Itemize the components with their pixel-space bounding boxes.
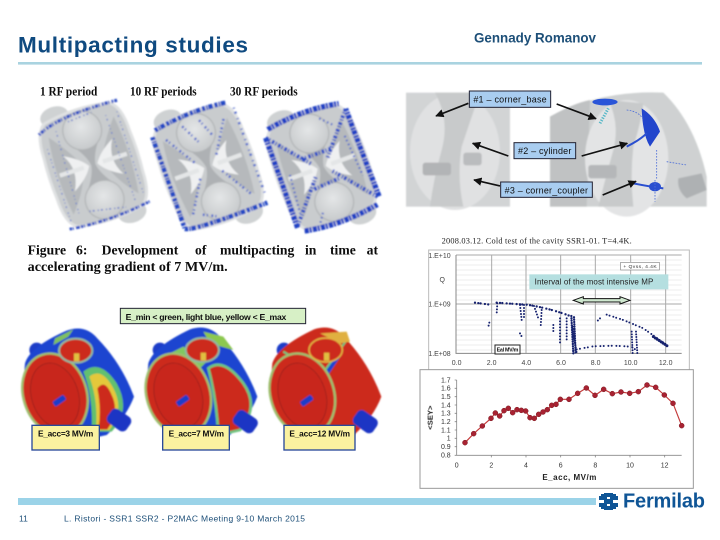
panel: development of multipacting in time: [28, 84, 388, 274]
x axis labels: 4.0: [521, 360, 531, 367]
axis unit box: [495, 345, 520, 354]
x axis labels: 4: [524, 462, 528, 469]
label: 7 MV/m: [163, 425, 229, 450]
label: 12 MV/m: [284, 425, 355, 450]
label: corner coupler: [501, 182, 592, 197]
y axis labels: [428, 253, 451, 358]
cavity: 30 RF periods: [255, 88, 388, 247]
image: cavity left view: [406, 93, 510, 210]
x axis labels: [452, 360, 673, 367]
y axis labels: 1.E+08: [428, 351, 451, 358]
y axis labels: 1.4: [441, 402, 451, 409]
chart legend: + Qvss, 4.4K: [623, 264, 657, 270]
label: 7 MV/m: E_acc=7 MV/m: [169, 429, 224, 439]
x axis labels: 2: [489, 462, 493, 469]
label: 12 MV/m: E_acc=12 MV/m: [289, 429, 350, 439]
footer text: L. Ristori - SSR1 SSR2 - P2MAC Meeting 9-10 March 2015: [64, 514, 305, 524]
cavity map: 7 MV/m: [135, 328, 260, 444]
y axis labels: 1.5: [441, 394, 451, 401]
figure caption: at: [367, 242, 378, 257]
scatter chart: cold test: [428, 237, 689, 388]
y axis labels: 1.2: [441, 419, 451, 426]
period labels: 1 RF period: [40, 84, 97, 98]
arrows: [436, 103, 636, 195]
figure caption: time: [330, 242, 356, 257]
y axis labels: 1.3: [441, 411, 451, 418]
figure caption: [28, 242, 378, 274]
cavity: 10 RF periods: [142, 87, 275, 246]
panel: multipacting locations: [406, 91, 707, 217]
x axis title: E_acc, MV/m: [542, 473, 596, 482]
figure caption: multipacting: [220, 242, 295, 257]
figure caption: Figure: [28, 242, 66, 257]
x axis labels: 10.0: [624, 360, 638, 367]
figure caption: 6:: [76, 242, 87, 257]
author name: Gennady Romanov: [474, 30, 596, 46]
Fermilab wordmark: Fermilab: [623, 490, 705, 512]
data points: [475, 303, 668, 354]
y axis labels: 1.E+09: [428, 302, 451, 309]
figure caption: in: [305, 242, 317, 257]
title: Multipacting studies: [18, 32, 248, 58]
label: 3 MV/m: E_acc=3 MV/m: [38, 429, 93, 439]
figure caption: accelerating gradient of 7 MV/m.: [28, 259, 228, 274]
legend: field range: [120, 308, 306, 324]
label: cylinder: #2 – cylinder: [518, 146, 571, 156]
x axis labels: 8.0: [591, 360, 601, 367]
footer bar: [18, 498, 596, 505]
data series: [462, 382, 684, 445]
icon: Fermilab logo mark: [599, 493, 618, 510]
blue electron tracks: [592, 99, 687, 202]
figure caption: of: [195, 242, 207, 257]
y axis labels: 1.1: [441, 427, 451, 434]
cavity map: 12 MV/m: [259, 328, 381, 444]
cavity map: 3 MV/m: [12, 329, 134, 444]
x axis labels: 6: [559, 462, 563, 469]
chart heading: 2008.03.12. Cold test of the cavity SSR1-01. T=4.4K.: [442, 237, 632, 246]
y axis labels: 0.8: [441, 452, 451, 459]
x axis labels: 0.0: [452, 360, 462, 367]
cavity: 1 RF period: [29, 86, 158, 243]
x axis labels: [455, 462, 669, 469]
y axis labels: 1.7: [441, 377, 451, 384]
callout: interval of most intensive MP: Interval of the most intensive MP: [535, 277, 653, 286]
x axis labels: 12.0: [659, 360, 673, 367]
x axis labels: 10: [626, 462, 634, 469]
period labels: [40, 84, 298, 98]
label: corner coupler: #3 – corner_coupler: [505, 185, 588, 195]
axis unit box: Eal MV/m: [497, 348, 519, 354]
y axis labels: 1: [447, 436, 451, 443]
y axis title: <SEY>: [426, 405, 435, 430]
line chart: SEY vs E_acc: [420, 370, 693, 488]
label: corner base: #1 – corner_base: [473, 95, 547, 105]
arrow: MP interval: [573, 297, 630, 304]
y axis labels: 1.6: [441, 386, 451, 393]
x axis labels: 12: [661, 462, 669, 469]
title underline: [18, 62, 702, 65]
callout: interval of most intensive MP: [529, 274, 668, 289]
label: cylinder: [514, 143, 576, 159]
panel: field maps at three gradients: [12, 308, 381, 450]
x axis labels: 0: [455, 462, 459, 469]
slide number: 11: [19, 514, 28, 524]
y axis labels: [441, 377, 451, 459]
legend: field range: E_min < green, light blue, yellow < E_max: [126, 312, 287, 322]
x axis labels: 8: [593, 462, 597, 469]
y axis labels: 1.E+10: [428, 253, 451, 260]
x axis labels: 2.0: [487, 360, 497, 367]
image: cavity right view with tracks: [550, 92, 707, 217]
label: corner base: [469, 91, 551, 107]
period labels: 10 RF periods: [130, 84, 197, 98]
y axis labels: 0.9: [441, 444, 451, 451]
period labels: 30 RF periods: [230, 84, 298, 98]
figure caption: Development: [102, 242, 179, 257]
x axis labels: 6.0: [556, 360, 566, 367]
chart legend: [621, 262, 659, 270]
y axis labels: Q: [440, 277, 446, 284]
label: 3 MV/m: [32, 425, 99, 450]
